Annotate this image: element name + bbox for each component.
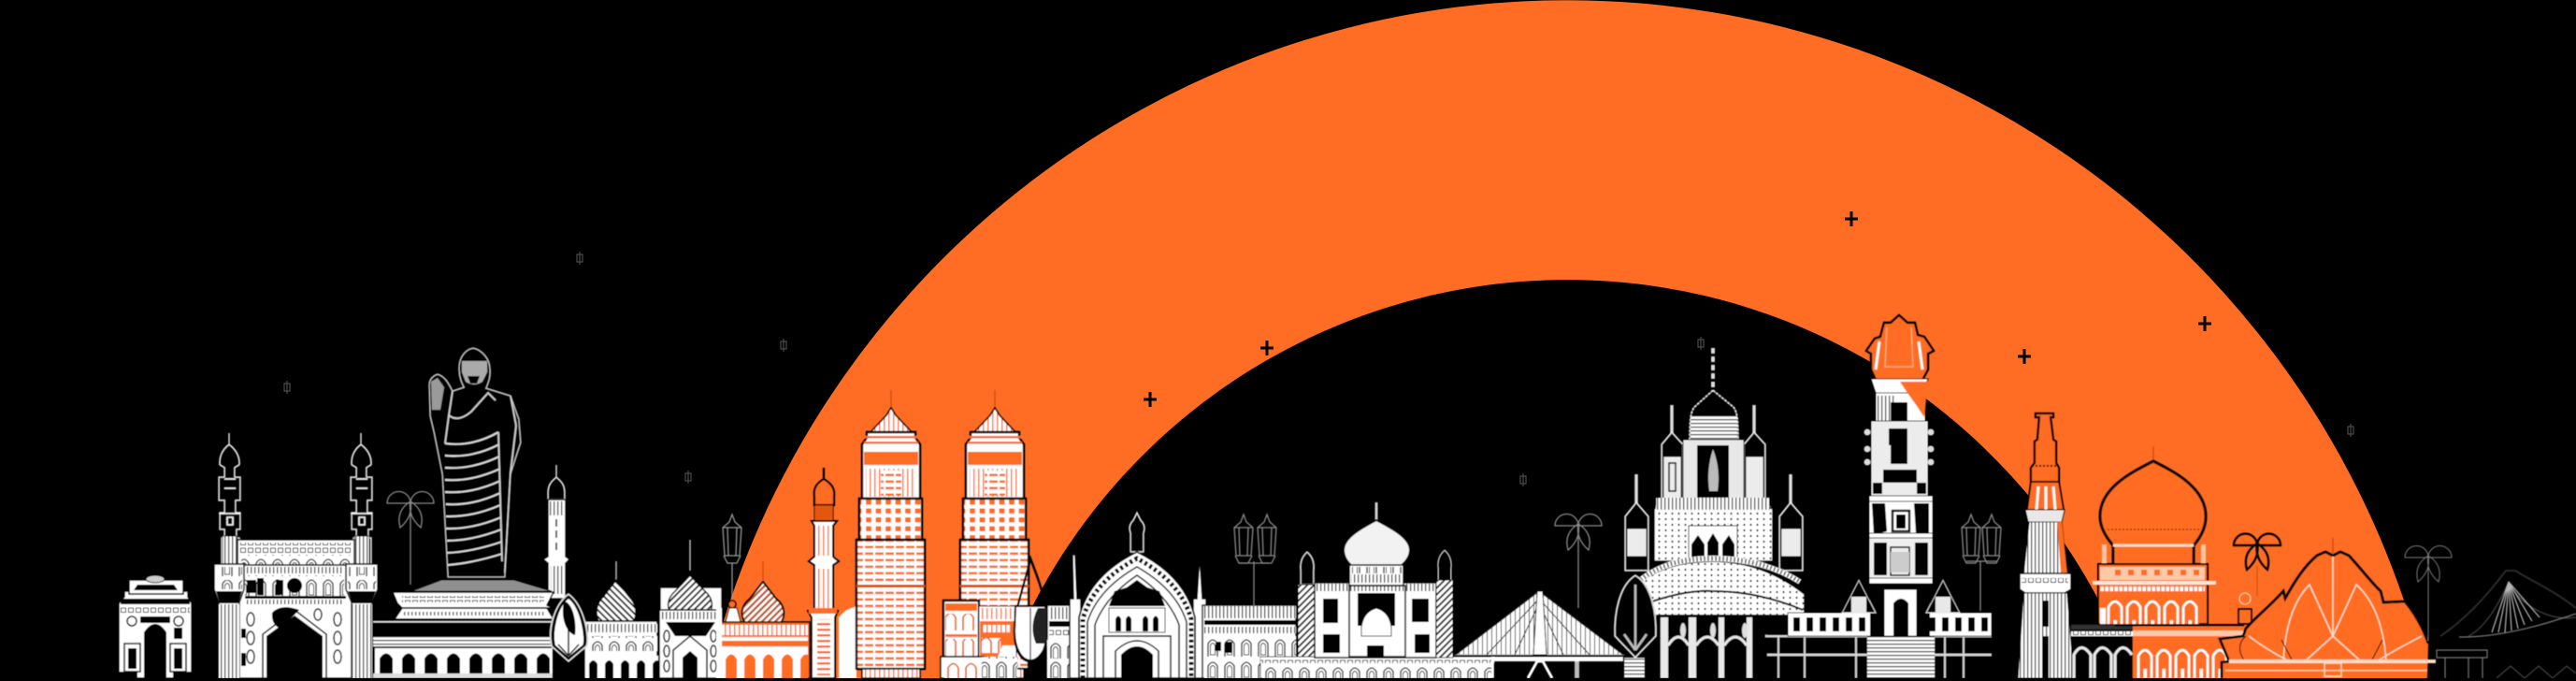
tower crown [1866,315,1934,384]
small lantern [2238,593,2252,624]
monument: low orange building [941,601,1017,678]
tree leaf left [551,594,587,661]
monument: twin tower one [856,390,925,678]
monument: Qutb Shahi tomb [2093,446,2216,624]
street lamp left [723,514,741,599]
street lamp centre [1234,514,1276,605]
statue face [462,361,487,384]
monument: statue plinth and arcade [373,580,554,678]
charminar right minaret [351,433,372,564]
monument: Safdarjung tomb [1260,502,1494,678]
statue robe folds [445,432,502,565]
palm on black right [2405,546,2452,641]
skyline of monuments [119,315,2576,678]
monument: dark pagoda temple [2437,571,2576,678]
monument: Lucknow gate [1047,513,1296,678]
street lamp right [1962,514,2001,611]
palm on arch [2234,533,2281,596]
monument: twin tower two [960,390,1029,678]
tree leaf right [1615,575,1656,678]
palm lamp left [387,492,434,585]
monument: India Gate [119,575,192,678]
ground line [0,678,2576,681]
monument: cable-stayed bridge [1456,591,1623,678]
monument: orange pavilion [711,561,810,678]
monument: Qutb Minar [2018,413,2074,678]
stars on the arch [1144,211,2211,407]
faint stars on black [284,252,2353,486]
monument: orange minaret [808,468,839,678]
monument: clock tower base [1765,613,1992,678]
white wash between minaret and tower [839,606,856,678]
monument: Charminar [214,433,378,678]
charminar left minaret [219,433,240,564]
monument: Dakshineswar temple [1625,348,1805,678]
tree leaf in front of gate [1015,558,1047,661]
monument: domed gate [659,540,722,678]
monument: left dome pavilion [584,561,658,678]
minaret beside statue [543,465,569,599]
monument: arcade below tomb [2071,624,2244,678]
monument: Lotus Temple [2220,538,2436,678]
monument: Buddha statue [429,348,521,577]
palm lamp centre [1555,514,1602,608]
orange arch [707,0,2427,681]
monument: clock tower [1842,315,1960,636]
